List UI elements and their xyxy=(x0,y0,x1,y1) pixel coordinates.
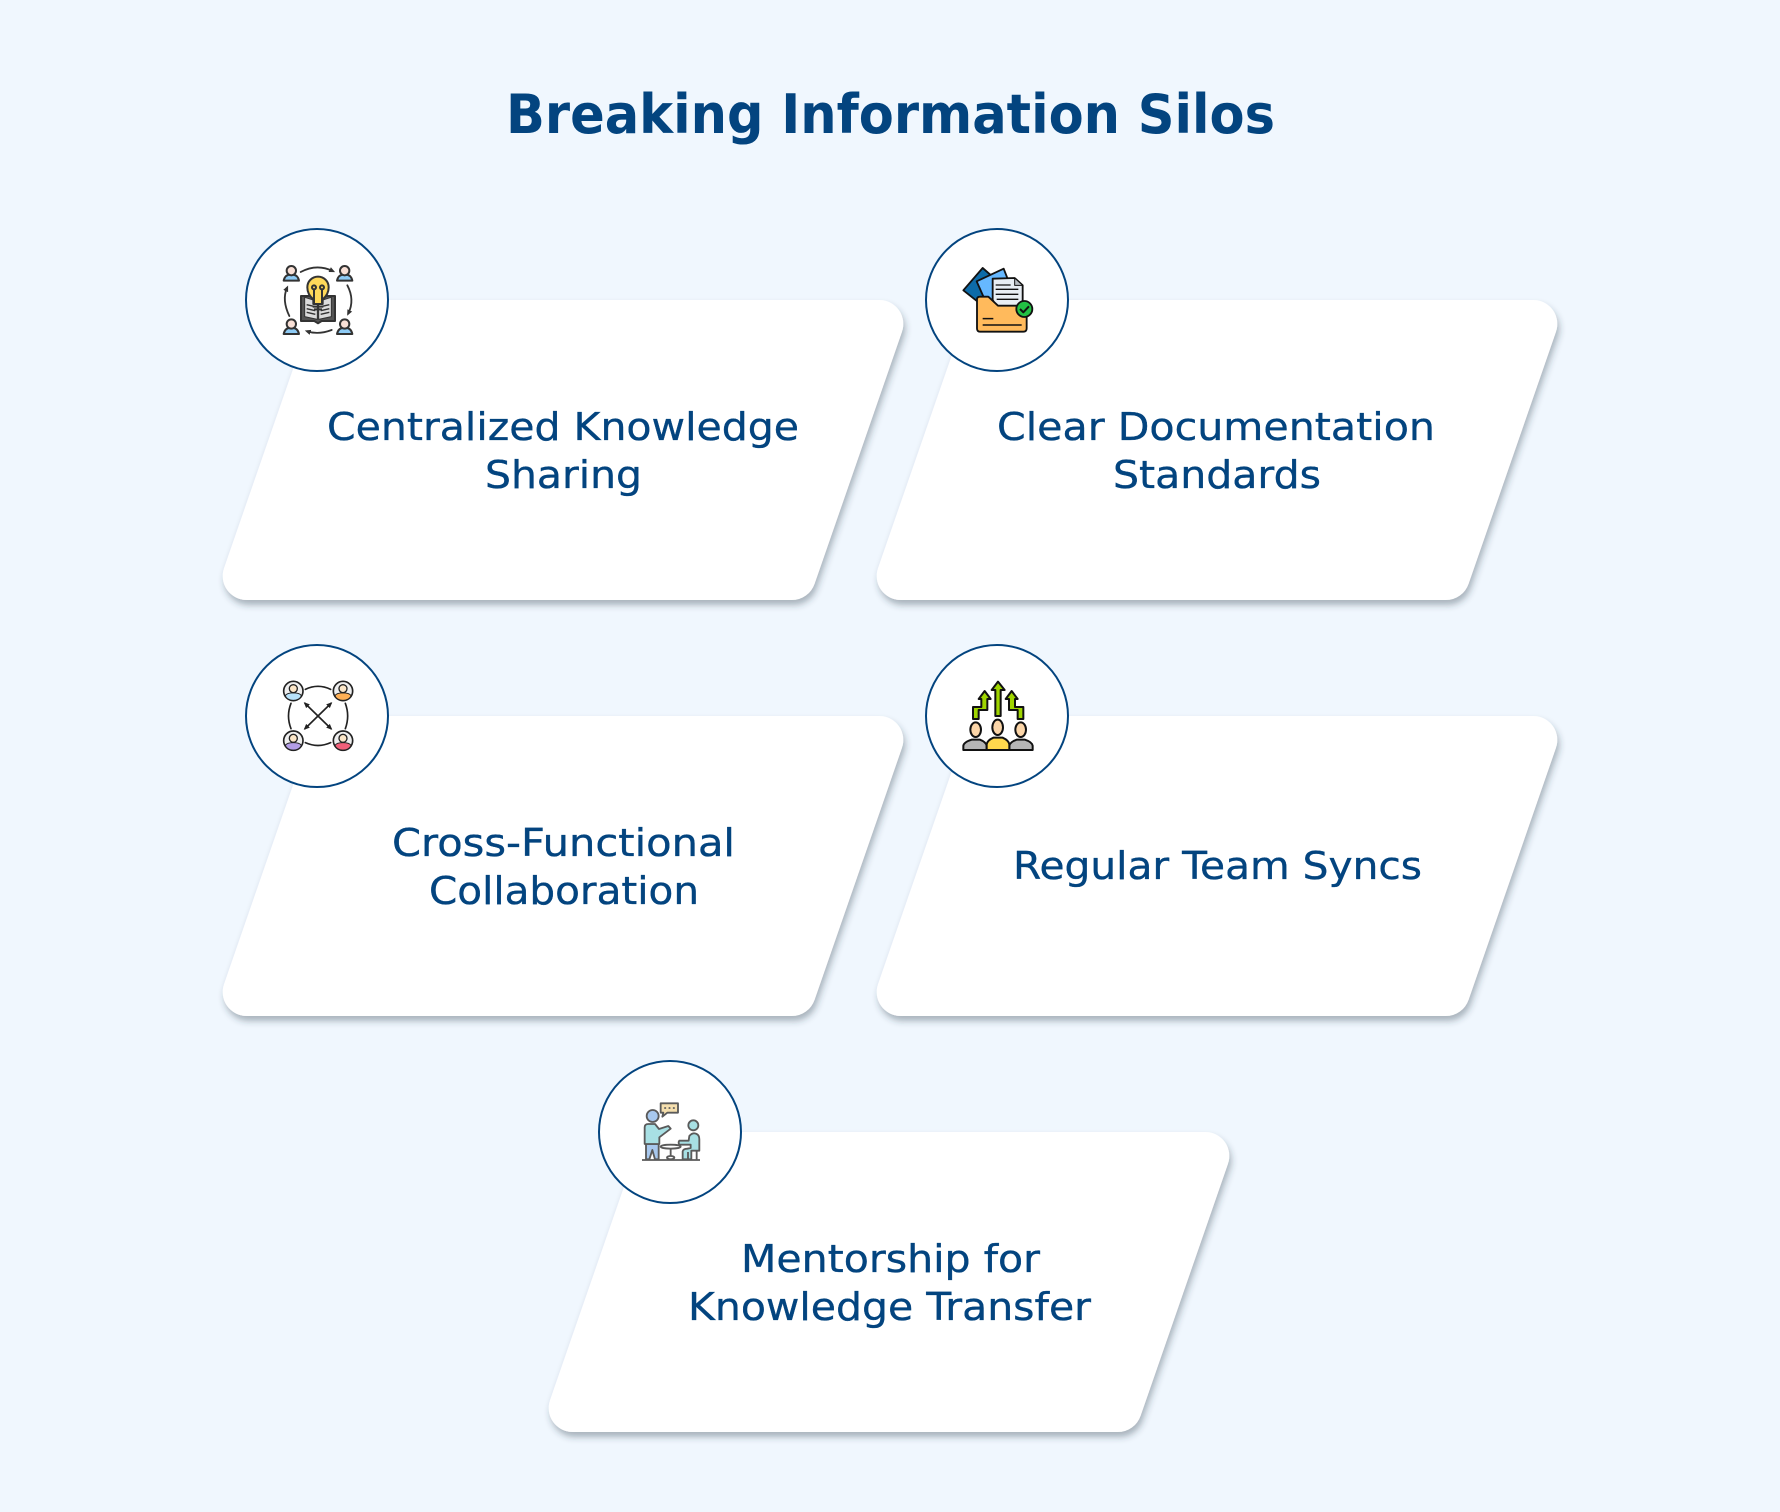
icon: knowledge sharing xyxy=(246,229,388,371)
label xyxy=(688,1237,1091,1330)
panel: Regular Team Syncs xyxy=(877,645,1557,1016)
label: Standards xyxy=(1113,453,1321,498)
label xyxy=(327,405,799,498)
icon: connected people xyxy=(246,645,388,787)
label: Knowledge Transfer xyxy=(688,1285,1091,1330)
panel: Clear Documentation Standards xyxy=(877,229,1557,600)
icon: document folder xyxy=(926,229,1068,371)
panel: Cross-Functional Collaboration xyxy=(223,645,903,1016)
label: Centralized Knowledge xyxy=(327,405,799,450)
label: Sharing xyxy=(485,453,642,498)
panel: Mentorship for Knowledge Transfer xyxy=(549,1061,1229,1432)
label: Clear Documentation xyxy=(997,405,1435,450)
card shape xyxy=(223,300,903,600)
card shape xyxy=(877,300,1557,600)
label: Collaboration xyxy=(429,869,699,914)
label: Regular Team Syncs xyxy=(1013,844,1422,889)
icon: mentor and mentee xyxy=(599,1061,741,1203)
panel: Centralized Knowledge Sharing xyxy=(223,229,903,600)
card shape xyxy=(549,1132,1229,1432)
icon: team with rising arrows xyxy=(926,645,1068,787)
label: Mentorship for xyxy=(741,1237,1040,1282)
label: Cross-Functional xyxy=(392,821,735,866)
card shape xyxy=(223,716,903,1016)
label xyxy=(997,405,1435,498)
card shape xyxy=(877,716,1557,1016)
title: Breaking Information Silos xyxy=(506,83,1275,146)
label xyxy=(392,821,735,914)
